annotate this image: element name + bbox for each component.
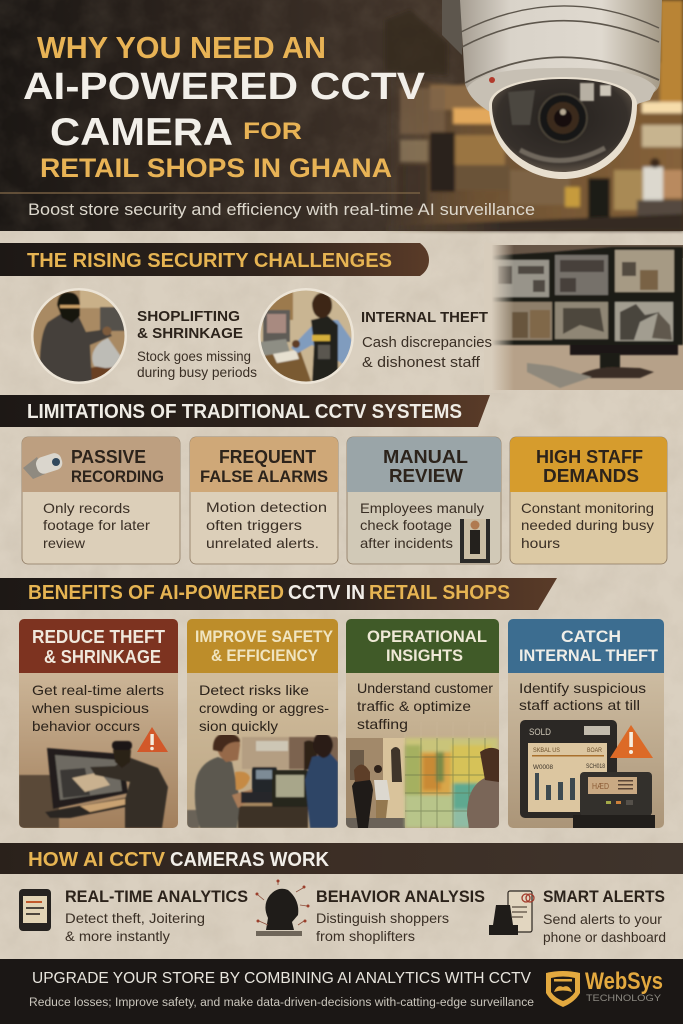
step: behavior analysis: from shoplifters xyxy=(316,928,415,944)
card: high staff demands xyxy=(510,437,667,564)
section banner: how AI CCTV cameras work xyxy=(0,843,683,874)
illustration: POS dashboard with alert: SKBAL US xyxy=(533,748,560,754)
description: internal theft xyxy=(362,334,492,371)
card: passive recording: RECORDING xyxy=(71,467,164,486)
card: reduce theft and shrinkage xyxy=(19,619,178,828)
card: improve safety and efficiency: sion quickly xyxy=(199,718,278,734)
section banner: rising security challenges xyxy=(0,243,429,276)
illustration: POS dashboard with alert xyxy=(520,720,655,828)
card: catch internal theft: staff actions at till xyxy=(519,697,640,713)
card: frequent false alarms: FALSE ALARMS xyxy=(200,467,328,486)
card: frequent false alarms: often triggers xyxy=(206,517,302,533)
icon: phone with analytics xyxy=(19,889,51,931)
description: internal theft: Cash discrepancies xyxy=(362,334,492,351)
card: high staff demands: DEMANDS xyxy=(543,466,639,486)
step: smart alerts: Send alerts to your xyxy=(543,911,662,927)
card: reduce theft and shrinkage: behavior occurs xyxy=(32,718,140,734)
card: operational insights: INSIGHTS xyxy=(386,646,463,665)
illustration: POS dashboard with alert: SOLD xyxy=(529,727,551,738)
card: manual review: MANUAL xyxy=(383,447,468,467)
card: reduce theft and shrinkage: REDUCE THEFT xyxy=(32,627,165,647)
section banner: benefits of AI CCTV: RETAIL SHOPS xyxy=(369,582,510,604)
section banner: how AI CCTV cameras work: CAMERAS WORK xyxy=(170,849,330,871)
illustration: customer heatmap xyxy=(346,736,499,828)
page background paper xyxy=(0,231,683,1024)
title: CAMERA xyxy=(50,111,233,154)
section banner: how AI CCTV cameras work: HOW AI CCTV xyxy=(28,849,166,871)
card: frequent false alarms: Motion detection xyxy=(206,499,327,515)
footer note: Reduce losses; Improve safety, and make data-driven-decisions with-catting-edge surveillance xyxy=(29,997,534,1009)
card: frequent false alarms: unrelated alerts. xyxy=(206,535,319,551)
card: reduce theft and shrinkage: when suspicious xyxy=(31,700,149,716)
heading: internal theft: INTERNAL THEFT xyxy=(361,309,488,326)
card: improve safety and efficiency: & EFFICIENCY xyxy=(211,646,319,665)
card: improve safety and efficiency: Detect risks like xyxy=(199,682,309,698)
heading: shoplifting and shrinkage: SHOPLIFTING xyxy=(137,308,240,325)
description: shoplifting: Stock goes missing xyxy=(137,348,251,364)
card: catch internal theft xyxy=(508,619,664,828)
card: manual review: check footage xyxy=(360,517,452,533)
card: high staff demands: HIGH STAFF xyxy=(536,447,643,467)
card: manual review: REVIEW xyxy=(389,466,463,486)
section banner: limitations of traditional CCTV xyxy=(0,395,490,427)
heading: shoplifting and shrinkage: & SHRINKAGE xyxy=(137,325,243,342)
step: real-time analytics: & more instantly xyxy=(65,928,170,944)
heading: shoplifting and shrinkage xyxy=(137,308,243,342)
description: shoplifting xyxy=(137,348,257,380)
card: passive recording xyxy=(22,437,180,564)
card: passive recording: review xyxy=(43,535,86,551)
card: operational insights: traffic & optimize xyxy=(357,698,471,714)
illustration: POS dashboard with alert: HÆD xyxy=(592,782,609,791)
card: reduce theft and shrinkage: & SHRINKAGE xyxy=(44,647,161,667)
card: high staff demands: needed during busy xyxy=(521,517,654,533)
illustration: POS dashboard with alert: W0008 xyxy=(533,764,553,771)
illustration: staff at checkout terminals xyxy=(187,733,338,828)
threat: internal theft xyxy=(258,288,492,384)
step: smart alerts: phone or dashboard xyxy=(543,929,666,945)
card: operational insights xyxy=(346,619,499,828)
card: frequent false alarms xyxy=(190,437,338,564)
step: smart alerts xyxy=(489,888,666,945)
card: high staff demands: Constant monitoring xyxy=(521,500,654,516)
icon: head with AI nodes xyxy=(256,880,310,936)
step: real-time analytics: REAL-TIME ANALYTICS xyxy=(65,888,248,906)
step: behavior analysis: BEHAVIOR ANALYSIS xyxy=(316,888,485,906)
description: shoplifting: during busy periods xyxy=(137,364,257,380)
card: passive recording: Only records xyxy=(43,500,130,516)
description: internal theft: & dishonest staff xyxy=(362,354,481,371)
logo: WebSys Technology xyxy=(546,968,663,1007)
step: smart alerts: SMART ALERTS xyxy=(543,888,665,906)
card: operational insights: Understand customer xyxy=(357,680,493,696)
card: passive recording: footage for later xyxy=(43,517,150,533)
icon: dome CCTV camera xyxy=(442,0,662,179)
card: reduce theft and shrinkage: Get real-time alerts xyxy=(32,682,164,698)
card: improve safety and efficiency: IMPROVE SAFETY xyxy=(195,627,334,646)
step: behavior analysis: Distinguish shoppers xyxy=(316,910,449,926)
card: improve safety and efficiency xyxy=(187,619,338,828)
illustration: staff at till xyxy=(258,288,356,384)
illustration: POS dashboard with alert: SCH018 xyxy=(586,764,606,770)
card: catch internal theft: Identify suspicious xyxy=(519,680,646,696)
illustration: person at monitor with alert xyxy=(19,727,168,828)
card: improve safety and efficiency: crowding or aggres- xyxy=(199,700,329,716)
subtitle: Boost store security and efficiency with real-time AI surveillance xyxy=(28,200,535,219)
card: catch internal theft: INTERNAL THEFT xyxy=(519,646,659,665)
illustration: POS dashboard with alert: BOAR xyxy=(587,748,603,754)
section banner: rising security challenges: THE RISING SECURITY CHALLENGES xyxy=(27,250,392,272)
step: behavior analysis xyxy=(256,880,485,944)
card: manual review: Employees manuly xyxy=(360,500,484,516)
title: FOR xyxy=(243,118,302,145)
card: manual review: after incidents xyxy=(360,535,453,551)
step: real-time analytics: Detect theft, Joitering xyxy=(65,910,205,926)
call to action: UPGRADE YOUR STORE BY COMBINING AI ANALYTICS WITH CCTV xyxy=(32,970,531,987)
icon: person at door xyxy=(460,519,490,563)
card: operational insights: staffing xyxy=(357,716,408,732)
header panel xyxy=(0,0,683,231)
image: security monitor wall xyxy=(484,243,683,393)
title: AI-POWERED CCTV xyxy=(23,66,426,108)
shop scene background xyxy=(380,0,683,231)
card: catch internal theft: CATCH xyxy=(561,627,621,646)
section banner: limitations of traditional CCTV: LIMITATIONS OF TRADITIONAL CCTV SYSTEMS xyxy=(27,401,462,423)
icon: security camera xyxy=(23,451,64,479)
card: manual review xyxy=(347,437,501,564)
section banner: benefits of AI CCTV: BENEFITS OF AI-POWERED xyxy=(28,582,284,604)
illustration: masked shoplifter xyxy=(30,288,128,384)
title: WHY YOU NEED AN xyxy=(37,30,326,65)
logo: WebSys Technology: TECHNOLOGY xyxy=(586,993,662,1004)
icon: alert document and bell xyxy=(489,891,534,935)
title xyxy=(23,30,426,183)
card: passive recording: PASSIVE xyxy=(71,447,146,467)
title: RETAIL SHOPS IN GHANA xyxy=(40,153,392,183)
section banner: benefits of AI CCTV: CCTV IN xyxy=(288,582,365,604)
threat: shoplifting xyxy=(30,288,257,384)
card: high staff demands: hours xyxy=(521,535,560,551)
step: real-time analytics xyxy=(19,888,248,944)
logo: WebSys Technology: WebSys xyxy=(585,968,663,995)
card: operational insights: OPERATIONAL xyxy=(367,627,487,646)
card: frequent false alarms: FREQUENT xyxy=(219,447,316,467)
footer panel xyxy=(0,959,683,1024)
section banner: benefits of AI CCTV xyxy=(0,578,557,610)
